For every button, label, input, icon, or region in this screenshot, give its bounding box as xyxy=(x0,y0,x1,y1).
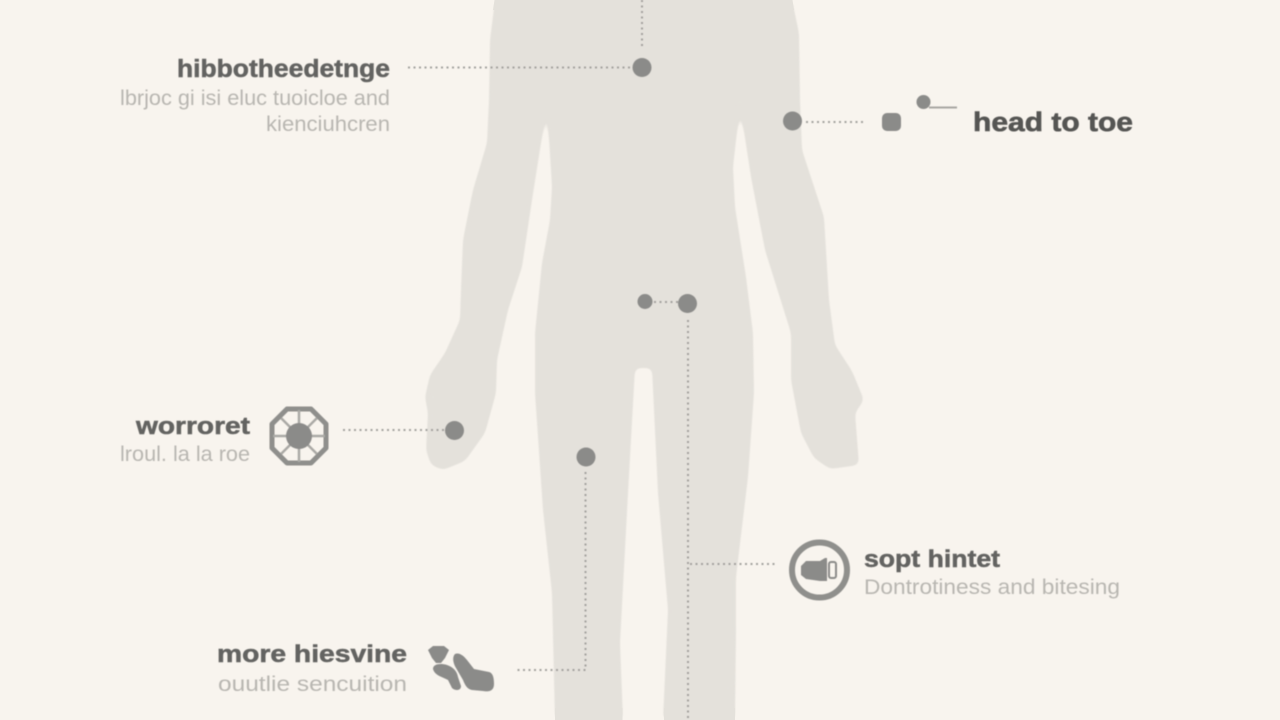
icon: small joint xyxy=(882,95,957,131)
callout: upper left xyxy=(120,55,390,136)
icon: feet xyxy=(428,646,494,691)
marker dots xyxy=(445,58,802,466)
description: lroul. la la roe xyxy=(120,443,250,466)
heading: more hiesvine xyxy=(217,641,407,668)
description xyxy=(120,87,390,136)
body silhouette xyxy=(425,0,864,720)
page content xyxy=(120,0,1133,720)
heading: worroret xyxy=(135,413,250,440)
description: Dontrotiness and bitesing xyxy=(864,576,1120,599)
callout: lower left xyxy=(217,641,494,696)
callout: lower right xyxy=(792,542,1120,599)
description: ouutlie sencuition xyxy=(218,673,407,696)
description: lbrjoc gi isi eluc tuoicloe and xyxy=(120,87,390,110)
heading: sopt hintet xyxy=(864,546,1000,573)
icon: thumb in ring xyxy=(792,542,847,598)
callout: middle left xyxy=(120,409,326,466)
heading: head to toe xyxy=(973,107,1133,137)
heading: hibbotheedetnge xyxy=(177,55,390,83)
icon: sun wheel xyxy=(272,409,326,463)
description: kienciuhcren xyxy=(266,113,390,136)
connector lines xyxy=(343,0,866,720)
callout: head to toe xyxy=(882,95,1133,137)
